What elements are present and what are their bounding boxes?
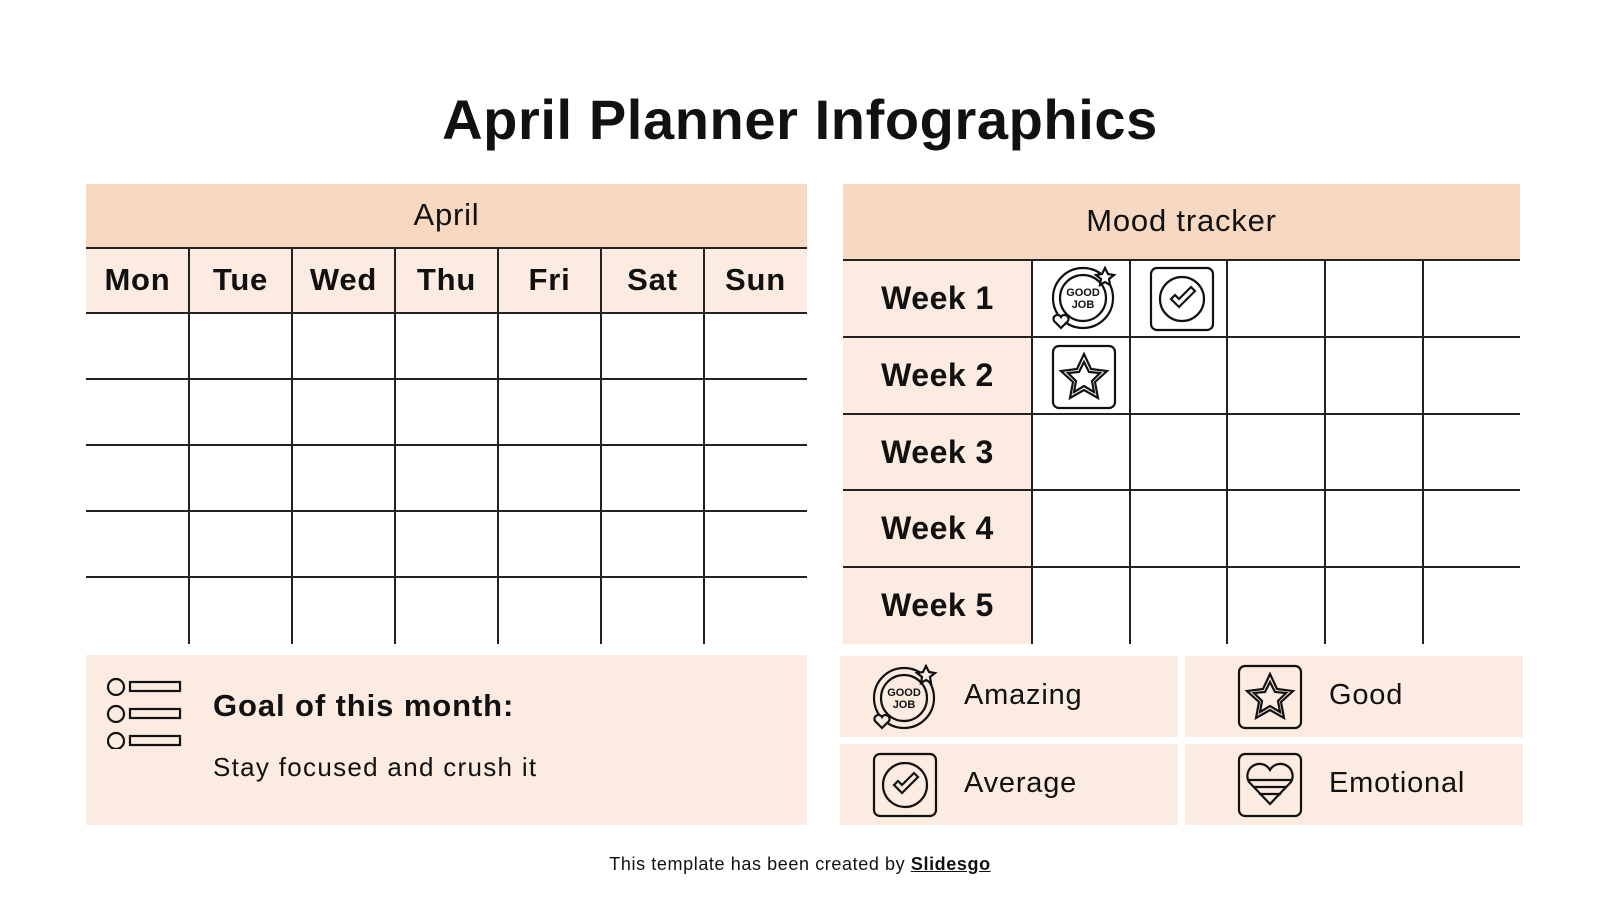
week labels: Week 1 [881,280,994,316]
legend: average [840,744,1178,825]
icon: good job [1053,268,1114,328]
legend: emotional: Emotional [1329,767,1465,799]
week labels [881,280,994,623]
day names: Sun [725,262,786,297]
icon: good job: GOOD [1066,287,1100,299]
day names: Thu [417,262,476,297]
icon: good star [1053,346,1115,408]
mood tracker header: Mood tracker [1086,203,1277,238]
footer credit: This template has been created by Slidesgo [609,854,991,874]
legend: amazing [840,656,1178,737]
day names: Sat [627,262,678,297]
title: April Planner Infographics [442,88,1158,151]
legend: good [1185,656,1523,737]
legend: good: Good [1329,679,1403,711]
goal text: Stay focused and crush it [213,752,537,782]
day names: Fri [528,262,570,297]
day names: Mon [104,262,171,297]
icon: average check [1151,268,1213,330]
legend: amazing: GOOD [887,687,921,699]
icon: checklist [106,678,182,749]
week labels: Week 5 [881,587,994,623]
goal heading: Goal of this month: [213,688,514,723]
week labels: Week 4 [881,510,994,546]
calendar panel [86,184,807,644]
icon: good job: JOB [1072,299,1094,311]
legend: amazing: Amazing [964,679,1082,711]
mood tracker panel [843,184,1520,644]
day names [104,262,786,297]
day names: Wed [310,262,377,297]
goal panel [86,655,807,825]
legend: emotional [1185,744,1523,825]
legend: average: Average [964,767,1077,799]
day names: Tue [213,262,268,297]
legend: amazing: JOB [893,699,915,711]
calendar header: April: April [413,197,480,232]
week labels: Week 3 [881,434,994,470]
week labels: Week 2 [881,357,994,393]
